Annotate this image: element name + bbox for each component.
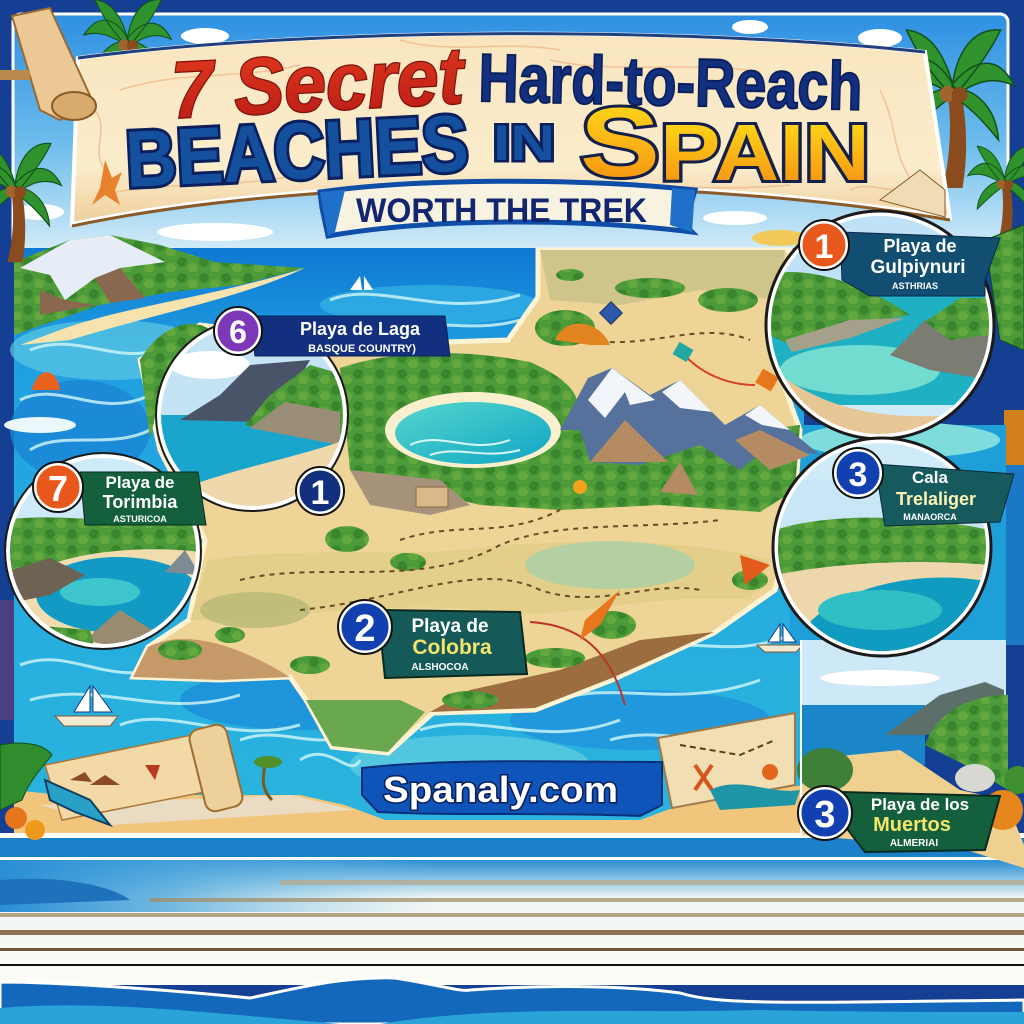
badge: 1: 1 bbox=[311, 474, 329, 512]
inland lagoon bbox=[385, 392, 561, 468]
panel: beach circle 3 bbox=[770, 438, 995, 660]
label: Playa de Torimbia: 7 bbox=[48, 468, 68, 509]
subtitle ribbon: WORTH THE TREK bbox=[356, 192, 647, 230]
palm tree left bbox=[0, 143, 62, 262]
title banner bbox=[72, 34, 950, 226]
label: Playa de Colobra: Colobra bbox=[412, 636, 492, 659]
palm tree top right bbox=[890, 30, 1014, 188]
title: Spain PAIN: PAIN bbox=[660, 108, 870, 197]
foam at shore bbox=[0, 1005, 1024, 1024]
label: Playa de los Muertos: ALMERIAI bbox=[890, 838, 938, 849]
bottom beach strip bbox=[0, 785, 1024, 838]
panel: beach circle 7 bbox=[5, 453, 205, 650]
compass and trail markers bbox=[416, 302, 779, 640]
panel: beach circle 1 bbox=[765, 211, 1000, 440]
label: Playa de los Muertos: Playa de los bbox=[871, 795, 969, 814]
sailboats bbox=[32, 276, 803, 726]
title: Hard-to-Reach: Hard-to-Reach bbox=[478, 40, 863, 125]
scroll roll on title bbox=[0, 8, 96, 120]
title text bbox=[123, 31, 870, 204]
label: Playa de los Muertos bbox=[798, 786, 1000, 852]
foliage right bbox=[983, 225, 1024, 830]
label: Playa de Torimbia bbox=[33, 462, 206, 525]
label: Cala Trebaluger: Trelaliger bbox=[896, 489, 976, 509]
bottom water bands bbox=[0, 838, 1024, 985]
label: Playa de Laga: BASQUE COUNTRY) bbox=[308, 343, 416, 355]
label: Playa de Gulpiyuri bbox=[799, 220, 1000, 296]
label: Cala Trebaluger: 3 bbox=[849, 456, 867, 494]
label: Playa de Torimbia: Torimbia bbox=[103, 492, 178, 512]
label: Playa de Gulpiyuri: Gulpiynuri bbox=[870, 257, 966, 278]
parchment scroll, bottom left bbox=[45, 723, 282, 825]
label: Playa de Colobra: 2 bbox=[354, 608, 376, 650]
title: Beaches: BEACHES bbox=[123, 98, 470, 204]
website banner bbox=[362, 761, 662, 816]
panel: beach circle 6 bbox=[155, 319, 350, 511]
snowy mountains coast bbox=[14, 235, 305, 345]
sea bbox=[4, 248, 1006, 835]
label: Playa de Colobra: Playa de bbox=[411, 616, 489, 637]
bottom wave bbox=[0, 978, 1024, 1024]
foliage bottom left bbox=[0, 743, 52, 840]
land: Spain map bbox=[133, 250, 800, 753]
palm tree top left bbox=[84, 0, 171, 112]
label: Playa de Laga: 6 bbox=[229, 314, 247, 350]
palm tree right bbox=[968, 146, 1024, 240]
label: Playa de Gulpiyuri: 1 bbox=[815, 228, 833, 266]
scene: Playa de los Muertos bbox=[797, 640, 1024, 868]
label: Playa de Gulpiyuri: ASTHRIAS bbox=[892, 281, 938, 291]
title: in: IN bbox=[493, 115, 555, 171]
label: Playa de Colobra bbox=[338, 600, 527, 678]
label: Playa de Torimbia: Playa de bbox=[106, 473, 174, 492]
subtitle ribbon bbox=[320, 181, 695, 236]
treasure map, bottom right bbox=[658, 713, 800, 810]
label: Playa de Gulpiyuri: Playa de bbox=[883, 236, 957, 256]
label: Playa de Torimbia: ASTURICOA bbox=[113, 514, 167, 524]
sky panel bbox=[13, 14, 1008, 254]
website banner: Spanaly.com bbox=[383, 769, 618, 810]
label: Playa de Colobra: ALSHOCOA bbox=[411, 662, 469, 673]
label: Playa de los Muertos: 3 bbox=[814, 794, 836, 836]
badge: 1 bbox=[296, 467, 344, 515]
label: Playa de Laga: Playa de Laga bbox=[300, 319, 421, 339]
label: Cala Trebaluger: Cala bbox=[912, 468, 948, 487]
title: Spain S: S bbox=[580, 87, 660, 197]
label: Cala Trebaluger: MANAORCA bbox=[903, 512, 957, 522]
central mountains bbox=[560, 368, 820, 495]
title: 7 Secret: 7 Secret bbox=[169, 31, 469, 135]
label: Playa de los Muertos: Muertos bbox=[873, 814, 951, 836]
label: Cala Trebaluger bbox=[833, 448, 1014, 526]
label: Playa de Laga bbox=[214, 307, 450, 356]
